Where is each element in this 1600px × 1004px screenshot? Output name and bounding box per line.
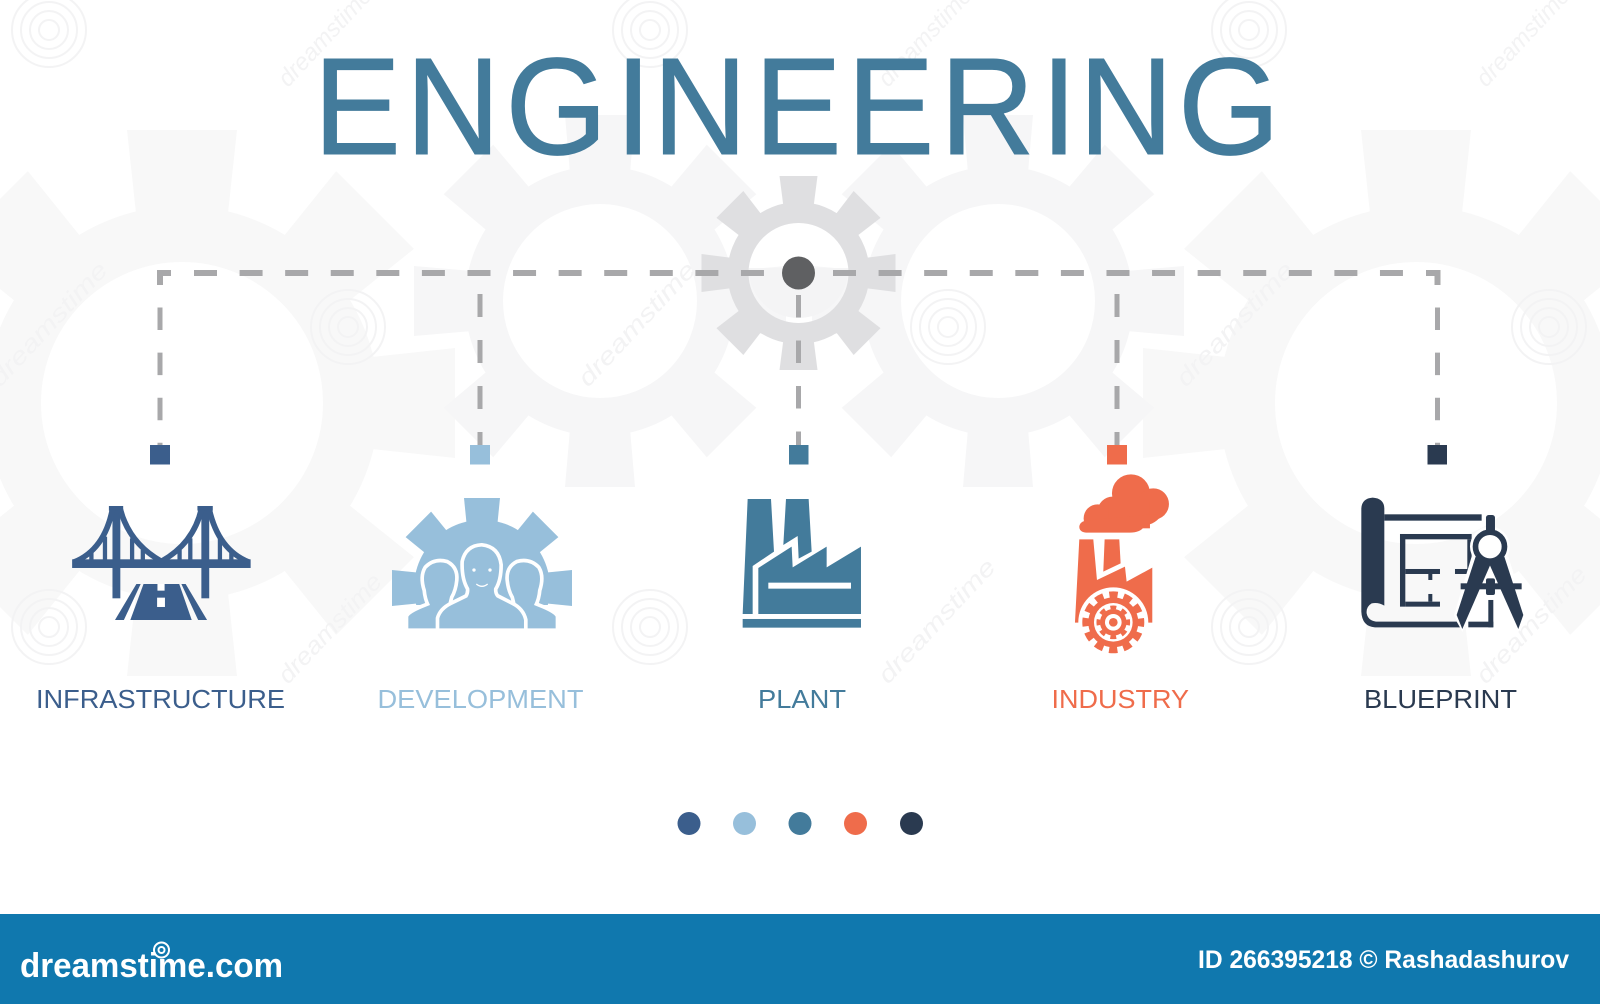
background gear: middle right — [812, 115, 1184, 487]
dashed connectors — [160, 273, 1438, 445]
watermark: spirals — [12, 0, 1586, 664]
marker: plant — [789, 445, 808, 464]
icon: industry factory with gear and smoke — [1075, 474, 1169, 657]
marker: infrastructure — [150, 445, 170, 464]
background gear: far right — [1143, 130, 1600, 676]
icon: suspension bridge — [72, 506, 251, 620]
footer: image id and credit: ID 266395218 © Rashadashurov — [1198, 946, 1569, 974]
watermark: diagonal text: dreamstime — [273, 568, 388, 689]
pagination dots — [678, 812, 923, 835]
label: plant: PLANT — [758, 684, 846, 714]
gear behind team — [392, 498, 572, 606]
marker: blueprint — [1428, 445, 1447, 464]
label: development: DEVELOPMENT — [378, 684, 584, 714]
center hub dot — [782, 256, 815, 290]
watermark: diagonal text — [0, 0, 1593, 689]
watermark: diagonal text: dreamstime — [573, 257, 702, 392]
watermark: diagonal text: dreamstime — [873, 554, 1002, 689]
label: infrastructure: INFRASTRUCTURE — [36, 684, 285, 714]
footer bar — [0, 914, 1600, 1004]
background gear: middle left — [414, 115, 786, 487]
watermark: diagonal text: dreamstime — [1471, 561, 1593, 689]
icon: team in gear — [380, 498, 580, 638]
marker: development — [470, 445, 490, 464]
white strip under team — [380, 628, 580, 638]
central gear — [702, 176, 896, 370]
icon: blueprint and compass — [1361, 498, 1527, 632]
marker: industry — [1107, 445, 1127, 464]
team silhouettes — [408, 547, 556, 628]
icon: factory plant — [743, 499, 861, 628]
title: ENGINEERING — [314, 29, 1280, 184]
label: blueprint: BLUEPRINT — [1364, 684, 1517, 714]
footer: site name: dreamstime.com — [20, 947, 283, 985]
label: industry: INDUSTRY — [1052, 684, 1189, 714]
footer: spiral logo — [154, 942, 169, 958]
background gear: far left — [0, 130, 455, 676]
watermark: diagonal text: dreamstime — [1171, 257, 1300, 392]
